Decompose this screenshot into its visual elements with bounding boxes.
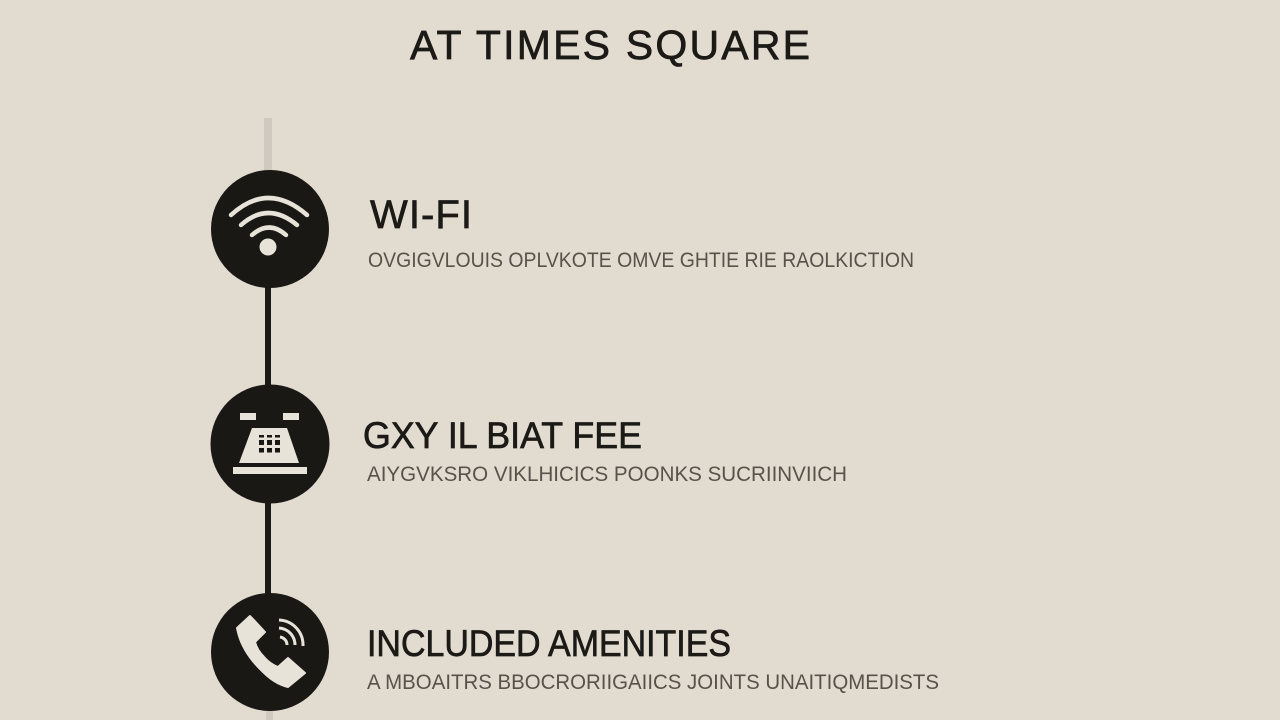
item: wi-fi: [211, 170, 914, 288]
heading: included amenities: INCLUDED AMENITIES: [367, 623, 731, 664]
timeline connector: [264, 118, 273, 720]
item: included amenities: [211, 593, 939, 711]
heading: wi-fi: WI-FI: [370, 193, 472, 237]
icon: wi-fi signal: [211, 170, 329, 288]
heading: phone fee: GXY IL BIAT FEE: [363, 415, 642, 456]
item: phone fee: [210, 384, 847, 504]
description: wi-fi: OVGIGVLOUIS OPLVKOTE OMVE GHTIE RIE RAOLKICTION: [368, 249, 914, 272]
icon: handset with signal: [211, 593, 329, 711]
description: phone fee: AIYGVKSRO VIKLHICICS POONKS SUCRIINVIICH: [367, 463, 847, 486]
title: AT TIMES SQUARE: [410, 22, 810, 68]
icon: desk telephone: [210, 384, 330, 504]
description: included amenities: A MBOAITRS BBOCRORIIGAIICS JOINTS UNAITIQMEDISTS: [367, 671, 939, 694]
